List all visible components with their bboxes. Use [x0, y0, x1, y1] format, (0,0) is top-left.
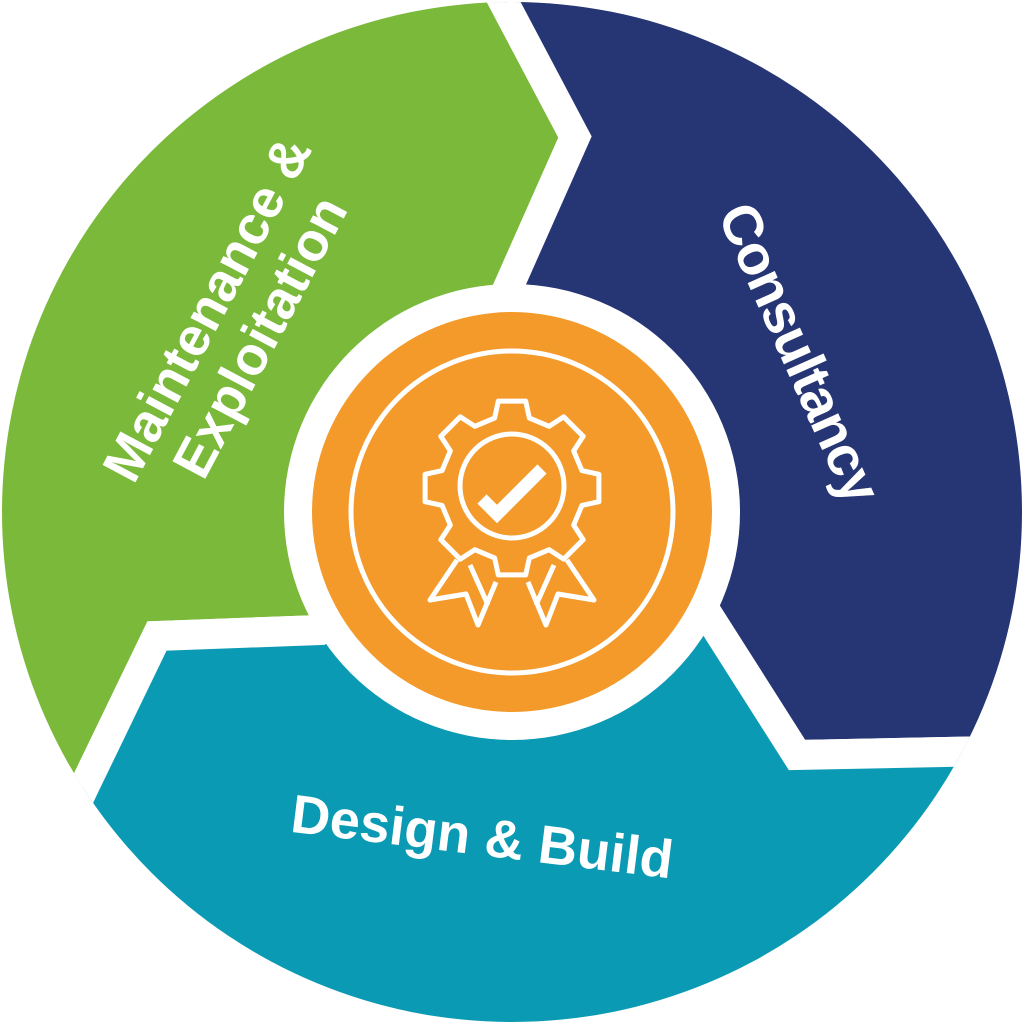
icon: gear badge with check — [425, 401, 599, 625]
label: design & build: Design & Build — [288, 784, 676, 890]
segment: design & build — [74, 606, 970, 1022]
center hub — [284, 284, 740, 740]
label: maintenance & exploitation: Maintenance & — [91, 127, 323, 491]
segment: maintenance & exploitation — [2, 2, 558, 788]
segment: consultancy — [492, 0, 1024, 755]
label: maintenance & exploitation: Exploitation — [161, 187, 359, 488]
label: consultancy: Consultancy — [706, 193, 894, 512]
